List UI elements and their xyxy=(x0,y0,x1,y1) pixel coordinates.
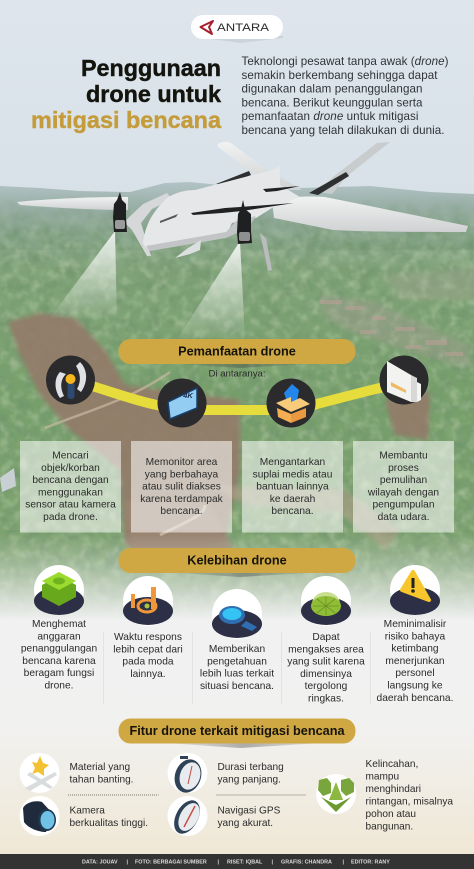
card: recovery: proses xyxy=(388,463,419,474)
rear wing left xyxy=(217,142,302,190)
feature text: agility: mampu xyxy=(366,772,399,782)
feature text: agility: pohon atau xyxy=(366,809,416,820)
footer credits: | xyxy=(126,860,128,866)
background: sky xyxy=(0,0,474,200)
feature text: material xyxy=(70,762,133,786)
intro paragraph: bencana yang telah dilakukan di dunia. xyxy=(242,124,444,137)
right wing xyxy=(272,196,468,232)
feature text: agility: rintangan, misalnya xyxy=(366,796,453,808)
title: mitigasi bencana xyxy=(31,107,222,133)
background: fade to pale panel xyxy=(0,528,474,621)
section heading: Fitur drone: Fitur drone terkait mitigasi bencana xyxy=(129,724,345,738)
card: deliver supplies: suplai medis atau xyxy=(253,469,332,480)
benefit text: access: tergolong xyxy=(305,681,348,692)
benefit text: risk: daerah bencana. xyxy=(377,693,453,704)
footer credits xyxy=(0,854,474,869)
icon: 4K monitor xyxy=(158,378,206,428)
card: monitor area: yang berbahaya xyxy=(145,469,219,480)
motor right xyxy=(237,200,252,244)
feature text: agility xyxy=(366,759,453,832)
logo: ANTARA: ANTARA xyxy=(217,22,270,34)
rear wing right xyxy=(318,142,390,194)
dark tail booms xyxy=(216,171,349,195)
section heading: Pemanfaatan drone: Pemanfaatan drone xyxy=(178,344,296,358)
benefit text: risk: risiko bahaya xyxy=(385,631,446,642)
icon: data documents xyxy=(380,356,428,404)
intro paragraph xyxy=(242,55,449,137)
section heading: Kelebihan drone: Kelebihan drone xyxy=(187,554,287,568)
benefit text: risk: personel xyxy=(395,668,435,679)
benefit text: access: ringkas. xyxy=(308,694,344,704)
icon: star on drone xyxy=(20,753,60,793)
light beam: left camera xyxy=(50,231,117,318)
footer credits: | xyxy=(272,860,274,866)
feature text: flight duration: Durasi terbang xyxy=(218,762,284,773)
logo: ANTARA xyxy=(191,15,283,43)
benefit text: response time xyxy=(113,632,183,680)
card: search victims: pada drone. xyxy=(43,512,98,523)
benefit text: budget: anggaran xyxy=(37,631,81,642)
icon: obstacle trees xyxy=(316,774,356,814)
footer credits: GRAFIS: CHANDRA xyxy=(281,860,332,866)
footer credits: | xyxy=(218,860,220,866)
icon: money stack xyxy=(34,565,84,615)
footer credits: RISET: IQBAL xyxy=(227,860,263,866)
benefit text: risk: menerjunkan xyxy=(385,656,445,667)
feature text: GPS: yang akurat. xyxy=(218,818,273,829)
text: Di antaranya: Di antaranya: xyxy=(208,368,266,380)
feature text: camera xyxy=(70,806,148,829)
icon: compass xyxy=(168,796,208,838)
benefit text: risk: Meminimalisir xyxy=(384,619,447,630)
footer credits: DATA: JOUAV xyxy=(82,860,118,866)
benefit text: knowledge xyxy=(200,644,274,692)
motor left xyxy=(113,192,127,232)
benefit text: access: Dapat xyxy=(312,632,340,643)
benefit text: budget: drone. xyxy=(44,680,74,692)
feature text: material: tahan banting. xyxy=(70,774,133,786)
benefit text: risk: langsung ke xyxy=(387,680,443,692)
feature text: camera: Kamera xyxy=(70,806,105,816)
icon: sensor signal xyxy=(46,356,95,404)
ventral fin xyxy=(175,240,201,258)
benefit text: risk xyxy=(377,619,453,704)
card: search victims: bencana dengan xyxy=(32,475,109,486)
footer credits: | xyxy=(342,860,344,866)
title: Penggunaan xyxy=(81,55,221,81)
benefit text: budget: penanggulangan xyxy=(21,644,97,655)
feature text: agility: menghindari xyxy=(366,784,421,795)
card: recovery: data udara. xyxy=(378,512,429,523)
feature text: GPS: Navigasi GPS xyxy=(218,806,281,816)
propeller right xyxy=(191,203,294,215)
intro paragraph: bencana. Berikut keunggulan serta xyxy=(242,96,423,109)
card: recovery: pemulihan xyxy=(380,475,427,486)
intro paragraph: semakin berkembang sehingga dapat xyxy=(242,69,438,82)
card: recovery xyxy=(353,441,454,532)
benefit text: response time: lebih cepat dari xyxy=(113,644,183,655)
connector line xyxy=(92,386,384,410)
card: monitor area xyxy=(131,441,232,532)
title xyxy=(31,55,222,133)
card: monitor area: Memonitor area xyxy=(146,457,218,468)
footer credits: EDITOR: RANY xyxy=(351,860,390,866)
benefit text: response time: Waktu respons xyxy=(114,632,182,643)
card: search victims xyxy=(20,441,121,532)
feature text: agility: Kelincahan, xyxy=(366,759,418,770)
background: lower panel xyxy=(0,620,474,854)
benefit text: response time: lainnya. xyxy=(130,669,166,680)
feature text: agility: bangunan. xyxy=(366,822,413,832)
section heading: Kelebihan drone xyxy=(118,548,356,577)
drone xyxy=(17,142,468,271)
intro paragraph: Teknolongi pesawat tanpa awak (drone) xyxy=(242,55,449,68)
icon: green target xyxy=(301,576,351,626)
card: deliver supplies xyxy=(242,441,343,532)
icon: response tower xyxy=(123,576,173,626)
card: monitor area: bencana. xyxy=(160,506,203,517)
benefit text: budget: Menghemat xyxy=(32,619,86,630)
benefit text: access: mengakses area xyxy=(288,644,364,655)
light beam: right camera xyxy=(178,241,245,338)
fuselage xyxy=(143,166,300,249)
background: aerial landslide photo xyxy=(0,182,474,620)
feature text: material: Material yang xyxy=(70,762,130,773)
intro paragraph: digunakan dalam penanggulangan xyxy=(242,83,422,96)
benefit text: knowledge: lebih luas terkait xyxy=(200,669,274,680)
card: search victims: menggunakan xyxy=(38,487,103,498)
icon: magnifier xyxy=(212,589,262,639)
left wing xyxy=(17,197,128,210)
section heading: Fitur drone xyxy=(118,718,356,748)
card: recovery: Membantu xyxy=(379,450,428,462)
intro paragraph: pemanfaatan drone untuk mitigasi xyxy=(242,110,418,123)
feature text: camera: berkualitas tinggi. xyxy=(70,818,148,829)
feature text: flight duration: yang panjang. xyxy=(218,774,281,786)
icon: 4K monitor: 4K xyxy=(182,391,193,400)
benefit text: access: yang sulit karena xyxy=(287,657,365,668)
benefit text: budget xyxy=(21,619,97,692)
card: search victims: Mencari xyxy=(52,450,89,462)
icon: warning sign xyxy=(390,565,440,615)
card: monitor area: karena terdampak xyxy=(140,494,224,505)
card: search victims: objek/korban xyxy=(41,463,100,474)
section heading: Pemanfaatan drone xyxy=(118,339,356,368)
benefit text: access xyxy=(287,632,365,704)
benefit text: access: dimensinya xyxy=(300,669,352,680)
card: deliver supplies: ke daerah xyxy=(270,494,315,505)
icon: supply box xyxy=(266,378,316,428)
feature text: GPS xyxy=(218,806,281,829)
card: search victims: sensor atau kamera xyxy=(25,500,116,511)
benefit text: response time: pada moda xyxy=(122,657,174,668)
feature text: flight duration xyxy=(218,762,284,786)
benefit text: knowledge: pengetahuan xyxy=(207,656,267,667)
benefit text: knowledge: situasi bencana. xyxy=(200,681,274,692)
card: recovery: wilayah dengan xyxy=(367,487,439,498)
benefit text: knowledge: Memberikan xyxy=(209,644,265,655)
benefit dividers xyxy=(104,632,370,704)
benefit text: risk: ketimbang xyxy=(391,644,439,655)
benefit text: budget: beragam fungsi xyxy=(24,668,94,679)
card: monitor area: atau sulit diakses xyxy=(142,482,221,493)
icon: camera lens xyxy=(20,796,60,836)
icon: stopwatch xyxy=(168,753,208,796)
card: recovery: pengumpulan xyxy=(372,500,435,511)
right landing strut xyxy=(260,233,272,271)
left tail arm xyxy=(124,193,172,256)
title: drone untuk xyxy=(86,81,222,107)
benefit text: budget: bencana karena xyxy=(22,656,96,667)
card: deliver supplies: bencana. xyxy=(271,506,314,517)
card: deliver supplies: bantuan lainnya xyxy=(256,482,329,493)
card: deliver supplies: Mengantarkan xyxy=(260,457,325,468)
footer credits: FOTO: BERBAGAI SUMBER xyxy=(135,860,207,866)
